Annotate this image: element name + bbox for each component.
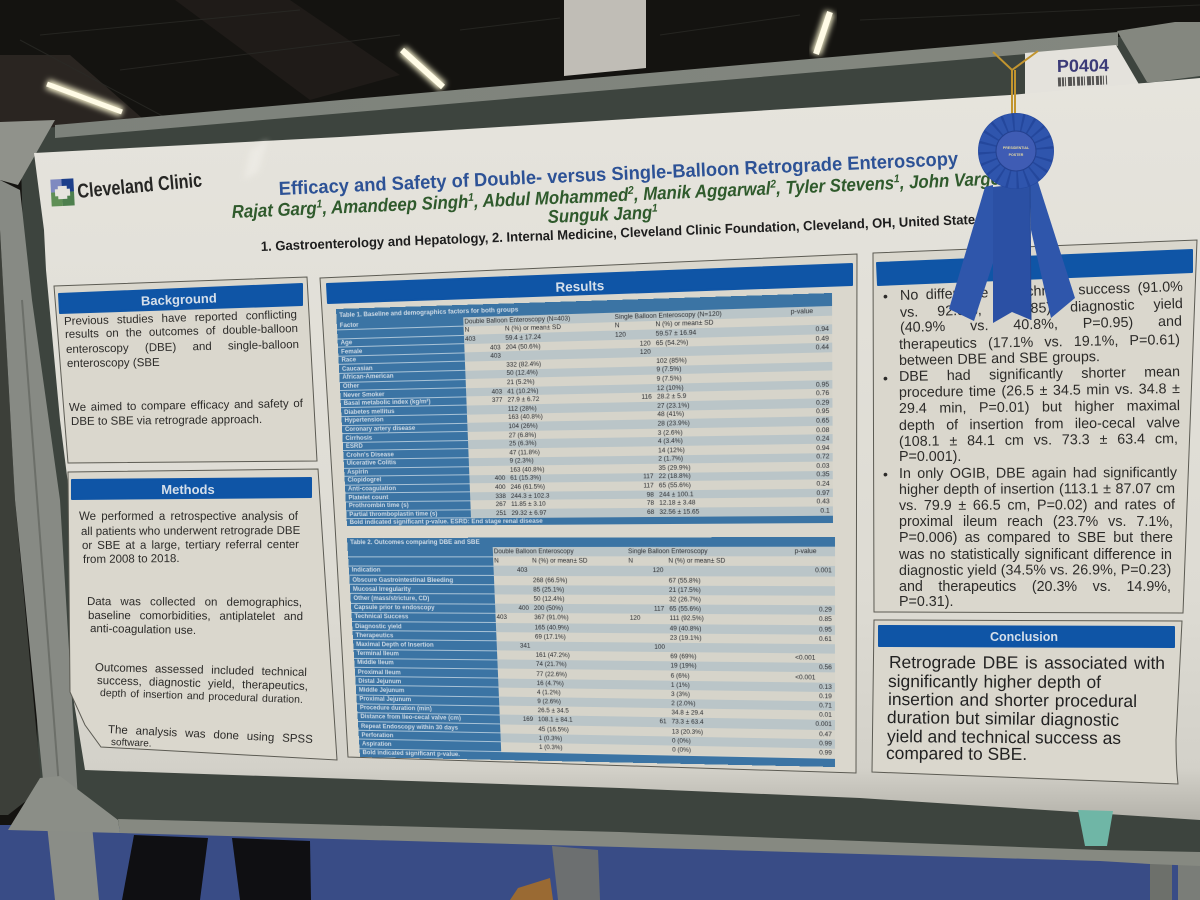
table 1: baseline and demographics: 244.3 ± 102.3 [511,492,550,500]
text: methods: or SBE at a large, tertiary referral center [82,539,299,552]
table 1: baseline and demographics: 9 (7.5%) [657,375,682,383]
title: Efficacy and Safety of Double- versus Single-Balloon Retrograde Enteroscopy [278,149,959,200]
text: key findings: procedure time (26.5 ± 34.5 min vs. 34.8 ± [899,381,1180,401]
table 2: outcomes comparing DBE and SBE: Bold indicated significant p-value. [362,749,460,758]
table 1: baseline and demographics: Never Smoker [343,391,385,399]
table 2: outcomes comparing DBE and SBE: Procedure duration (min) [360,705,432,713]
table 1: baseline and demographics: 35 (29.9%) [658,464,691,472]
table 2: outcomes comparing DBE and SBE: 49 (40.8%) [670,625,701,632]
icon: presidential poster ribbon: PRESIDENTIAL [1003,146,1030,150]
panel: conclusion: Conclusion [990,630,1058,644]
text: conclusion [886,652,1165,764]
table 1: baseline and demographics: Table 1. Baseline and demographics factors for both groups [339,306,518,319]
text: key findings: P=0.31). [899,594,953,610]
text: methods: anti-coagulation use. [90,623,196,637]
table 1: baseline and demographics: Race [341,356,356,364]
text: key findings: higher depth of insertion (113.1 ± 87.07 cm [899,481,1175,498]
table 2: outcomes comparing DBE and SBE: 0.61 [819,635,832,643]
table 1: baseline and demographics: ESRD [346,443,363,450]
table 2: outcomes comparing DBE and SBE: Indication [352,567,381,574]
table 2: outcomes comparing DBE and SBE: 0 (0%) [672,747,691,754]
table 2: outcomes comparing DBE and SBE: 367 (91.0%) [534,614,569,622]
table 1: baseline and demographics: Anti-coagulation [348,485,396,493]
table 2: outcomes comparing DBE and SBE: 0.85 [819,616,832,624]
authors line two: 1 [652,202,658,215]
table 1: baseline and demographics: 251 [496,510,507,517]
authors line one: , Abdul Mohammed [473,184,630,212]
table 2: outcomes comparing DBE and SBE: p-value [795,548,817,555]
table 1: baseline and demographics: 28 (23.9%) [658,420,690,428]
text: key findings: depth of insertion from ileo-cecal valve [899,415,1180,434]
table 1: baseline and demographics: 0.35 [816,471,830,479]
table 1: baseline and demographics: Ulcerative Colitis [347,460,396,467]
table 1: baseline and demographics: 65 (55.6%) [659,482,691,489]
table 2: outcomes comparing DBE and SBE: Aspiration [362,741,392,748]
table 1: baseline and demographics: 61 (15.3%) [510,475,541,482]
table 2: outcomes comparing DBE and SBE: Technical Success [354,613,409,621]
panel: conclusion [872,620,1182,784]
table 1: baseline and demographics: Partial thromboplastin time (s) [349,510,438,518]
poster number tag: P0404 [1057,55,1109,76]
table 1: baseline and demographics: 338 [495,493,506,500]
table 2: outcomes comparing DBE and SBE: 74 (21.7%) [536,661,567,669]
text: key findings: P=0.001). [899,449,961,465]
table 1: baseline and demographics: 0.1 [820,507,830,515]
table 2: outcomes comparing DBE and SBE: N (%) or mean± SD [532,558,588,565]
text: conclusion: compared to SBE. [886,743,1027,764]
table 1: baseline and demographics: Caucasian [342,365,373,373]
poster number tag [1025,45,1140,96]
text: background [64,309,303,428]
table 2: outcomes comparing DBE and SBE: 0.71 [819,702,832,710]
table 1: baseline and demographics: Basal metabolic index (kg/m²) [344,398,431,407]
table 1: baseline and demographics: N (%) or mean± SD [505,324,561,333]
table 2: outcomes comparing DBE and SBE: Distance from Ileo-cecal valve (cm) [360,714,461,722]
table 1: baseline and demographics: Hypertension [344,417,384,424]
text: methods: The analysis was done using SPSS [108,724,313,746]
table 1: baseline and demographics: 0.94 [816,444,829,452]
table 2: outcomes comparing DBE and SBE: 403 [517,567,528,574]
table 2: outcomes comparing DBE and SBE: N [628,558,633,565]
panel: results [320,254,857,773]
table 2: outcomes comparing DBE and SBE: <0.001 [795,654,815,662]
table 2: outcomes comparing DBE and SBE: 0.99 [819,749,832,757]
table 2: outcomes comparing DBE and SBE: 0.29 [819,606,832,614]
table 2: outcomes comparing DBE and SBE: 120 [630,615,641,622]
table 2: outcomes comparing DBE and SBE: 0.13 [819,683,832,691]
table 1: baseline and demographics: Prothrombin time (s) [349,502,409,510]
table 2: outcomes comparing DBE and SBE: 21 (17.5%) [669,587,701,594]
table 2: outcomes comparing DBE and SBE: 200 (50%) [534,605,563,612]
table 1: baseline and demographics: 0.95 [816,381,829,388]
table 2: outcomes comparing DBE and SBE: 26.5 ± 34.5 [538,707,569,715]
panel: key findings [873,240,1197,613]
table 2: outcomes comparing DBE and SBE: Middle Jejunum [359,687,405,694]
table 1: baseline and demographics: 400 [495,484,506,491]
table 1: baseline and demographics: 0.08 [816,426,829,434]
table 1: baseline and demographics: 32.56 ± 15.65 [659,508,699,516]
text: key findings: (40.9% vs. 40.8%, P=0.95) and [900,314,1182,336]
table 1: baseline and demographics: 117 [643,474,654,481]
table 1: baseline and demographics: 0.65 [816,417,829,425]
text: key findings: (108.1 ± 84.1 cm vs. 73.3 ± 63.4 cm, [899,431,1178,450]
table 1: baseline and demographics: 9 (2.3%) [510,458,534,465]
table 1: baseline and demographics: 25 (6.3%) [509,440,537,448]
text: conclusion: yield and technical success as [887,726,1121,748]
table 1: baseline and demographics: 403 [490,353,501,360]
table 2: outcomes comparing DBE and SBE: 61 [659,719,667,726]
table 1: baseline and demographics: Clopidogrel [347,477,382,484]
table 2: outcomes comparing DBE and SBE: 69 (69%) [670,653,696,661]
table 2: outcomes comparing DBE and SBE: 3 (3%) [671,691,690,698]
authors line one: , Amandeep Singh [321,191,469,218]
table 1: baseline and demographics: 267 [496,501,506,508]
table 1: baseline and demographics: p-value [791,307,813,316]
table 1: baseline and demographics: 78 [647,500,654,507]
text: background: DBE to SBE via retrograde approach. [71,414,262,428]
authors line one: 1 [894,173,900,186]
table 2: outcomes comparing DBE and SBE: <0.001 [795,674,816,681]
table 2: outcomes comparing DBE and SBE: 341 [520,642,531,650]
table 1: baseline and demographics: 0.24 [816,435,829,443]
text: methods [79,511,313,750]
table 2: outcomes comparing DBE and SBE: Middle Ileum [357,659,394,667]
table 2: outcomes comparing DBE and SBE: 111 (92.5%) [669,615,704,623]
text: key findings: • [883,466,888,482]
text: methods: from 2008 to 2018. [83,553,180,566]
table 1: baseline and demographics: 120 [640,340,651,347]
table 1: baseline and demographics: 27 (23.1%) [657,402,689,410]
table 2: outcomes comparing DBE and SBE: Maximal Depth of Insertion [356,641,434,649]
table 2: outcomes comparing DBE and SBE: Other (mass/stricture, CD) [353,595,430,602]
text: key findings: therapeutics (17.1% vs. 19.1%, P=0.61) [899,332,1180,353]
table 1: baseline and demographics: 0.76 [816,390,829,398]
text: key findings: and therapeutics (20.3% vs. 14.9%, [899,579,1171,595]
table 2: outcomes comparing DBE and SBE: 268 (66.5%) [533,577,567,584]
text: conclusion: insertion and shorter procedural [888,689,1137,711]
text: background: Previous studies have reported conflicting [64,309,297,328]
table 2: outcomes comparing DBE and SBE: 169 [523,716,533,723]
table 1: baseline and demographics: Single Balloon Enteroscopy (N=120) [614,310,722,321]
text: key findings: In only OGIB, DBE again had significantly [899,465,1177,482]
logo: Cleveland Clinic: Cleveland Clinic [76,170,203,203]
text: conclusion: duration but similar diagnostic [887,707,1119,730]
table 1: baseline and demographics: 68 [647,509,654,516]
table 1: baseline and demographics: 246 (61.5%) [510,484,545,491]
table 1: baseline and demographics: 65 (54.2%) [656,339,688,347]
text: key findings: vs. 92.5%, P=0.85) diagnostic yield [900,296,1183,321]
table 2: outcomes comparing DBE and SBE: 0.001 [815,721,832,729]
table 2: outcomes comparing DBE and SBE [347,537,835,767]
text: conclusion: significantly higher depth of [888,671,1101,692]
table 1: baseline and demographics: Other [343,382,359,390]
table 2: outcomes comparing DBE and SBE: 9 (2.6%) [537,698,561,706]
table 1: baseline and demographics: 59.57 ± 16.94 [656,329,696,338]
table 1: baseline and demographics: 400 [495,475,505,483]
table 1: baseline and demographics: 0.24 [816,480,830,488]
authors line one: , John Vargo [898,168,1001,193]
table 1: baseline and demographics: African-American [342,373,394,381]
table 1: baseline and demographics: 0.49 [816,335,829,343]
table 1: baseline and demographics: N [615,322,620,330]
text: methods: all patients who underwent retrograde DBE [81,525,300,538]
table 2: outcomes comparing DBE and SBE: 6 (6%) [671,672,690,679]
table 1: baseline and demographics: 104 (26%) [508,422,538,430]
table 2: outcomes comparing DBE and SBE: Repeat Endoscopy within 30 days [361,723,458,731]
table 2: outcomes comparing DBE and SBE: 19 (19%) [670,663,697,670]
table 1: baseline and demographics: 0.72 [816,453,830,461]
table 2: outcomes comparing DBE and SBE: N [494,558,499,565]
table 1: baseline and demographics: 14 (12%) [658,447,685,454]
table 2: outcomes comparing DBE and SBE: 161 (47.2%) [536,652,570,659]
table 1: baseline and demographics: 112 (28%) [508,405,537,413]
table 1: baseline and demographics: 204 (50.6%) [506,343,541,351]
table 1: baseline and demographics: 403 [491,388,502,395]
table 1: baseline and demographics: 403 [490,344,501,351]
text: key findings: • [883,370,888,386]
table 2: outcomes comparing DBE and SBE: Therapeutics [355,632,393,639]
table 2: outcomes comparing DBE and SBE: 77 (22.6%) [536,670,567,678]
text: key findings: diagnostic yield (34.5% vs. 26.9%, P=0.23) [899,562,1171,579]
table 1: baseline and demographics: 4 (3.4%) [658,438,683,445]
table 1: baseline and demographics: 0.03 [816,462,830,470]
table 2: outcomes comparing DBE and SBE: 16 (4.7%) [537,680,564,687]
text: key findings: 29.4 min, P=0.01) but higher maximal [899,398,1180,417]
text: key findings: P=0.006) as compared to SBE but there [899,530,1173,546]
table 2: outcomes comparing DBE and SBE: 23 (19.1%) [670,634,702,642]
table 2: outcomes comparing DBE and SBE: 0.99 [819,740,832,747]
panel: results: Results [555,278,604,295]
text: background: results on the outcomes of double-balloon [65,323,298,341]
table 1: baseline and demographics: 244 ± 100.1 [659,491,694,498]
table 2: outcomes comparing DBE and SBE: 1 (0.3%) [539,735,562,742]
table 2: outcomes comparing DBE and SBE: Proximal Jejunum [359,696,411,703]
text: background: We aimed to compare efficacy and safety of [69,398,303,414]
text: key findings: was no statistically significant difference in [899,547,1172,563]
table 1: baseline and demographics: Double Balloon Enteroscopy (N=403) [464,315,570,325]
table 1: baseline and demographics: 3 (2.6%) [658,429,683,436]
table 2: outcomes comparing DBE and SBE: 34.8 ± 29.4 [671,709,703,717]
icon: teal paper cup [1078,810,1113,846]
text: methods: We performed a retrospective analysis of [79,511,298,523]
table 2: outcomes comparing DBE and SBE: 0.01 [819,712,832,719]
table 1: baseline and demographics: 22 (18.8%) [659,473,691,481]
table 2: outcomes comparing DBE and SBE: Double Balloon Enteroscopy [494,548,574,555]
table 2: outcomes comparing DBE and SBE: Single Balloon Enteroscopy [628,548,708,555]
table 2: outcomes comparing DBE and SBE: Table 2. Outcomes comparing DBE and SBE [350,539,480,546]
table 1: baseline and demographics: Coronary artery disease [345,425,415,433]
table 1: baseline and demographics: 403 [465,336,476,343]
table 2: outcomes comparing DBE and SBE: 69 (17.1%) [535,633,566,641]
table 1: baseline and demographics: 59.4 ± 17.24 [505,334,541,342]
authors line two: Sunguk Jang [547,202,653,227]
table 1: baseline and demographics: 98 [647,491,654,498]
text: key findings: • [883,288,888,304]
table 1: baseline and demographics: Platelet count [348,494,388,501]
authors line one: 1 [316,198,323,211]
text: methods: Outcomes assessed included technical [95,662,307,679]
table 1: baseline and demographics: 48 (41%) [657,411,684,419]
text: methods: success, diagnostic yield, therapeutics, [97,675,308,693]
table 1: baseline and demographics: 163 (40.8%) [510,466,545,474]
table 2: outcomes comparing DBE and SBE: 85 (25.1%) [533,586,564,593]
table 1: baseline and demographics: 12 (10%) [657,384,684,392]
table 2: outcomes comparing DBE and SBE: 65 (55.6%) [669,606,701,613]
table 1: baseline and demographics: 41 (10.2%) [507,387,538,395]
table 2: outcomes comparing DBE and SBE: 0.19 [819,693,832,700]
affiliations: 1. Gastroenterology and Hepatology, 2. Internal Medicine, Cleveland Clinic Foundation, Cleveland, OH, United States [261,212,983,254]
table 2: outcomes comparing DBE and SBE: Diagnostic yield [355,623,402,630]
table 1: baseline and demographics: 50 (12.4%) [506,369,538,377]
panel: background: Background [141,290,217,309]
table 2: outcomes comparing DBE and SBE: 45 (16.5%) [538,726,569,733]
text: key findings: proximal ileum reach (23.7% vs. 7.1%, [899,514,1173,530]
table 1: baseline and demographics: 0.94 [816,325,829,333]
text: key findings: DBE had significantly shorter mean [899,364,1180,385]
table 1: baseline and demographics: 27 (6.8%) [509,431,536,439]
table 1: baseline and demographics: 332 (82.4%) [506,360,541,369]
table 1: baseline and demographics: 102 (85%) [656,357,687,365]
table 2: outcomes comparing DBE and SBE: Obscure Gastrointestinal Bleeding [352,576,453,584]
table 2: outcomes comparing DBE and SBE: 0 (0%) [672,737,691,745]
table 1: baseline and demographics: 0.44 [816,344,829,352]
table 2: outcomes comparing DBE and SBE: 4 (1.2%) [537,689,561,696]
table 1: baseline and demographics: 11.85 ± 3.10 [511,501,546,508]
table 1: baseline and demographics: Bold indicated significant p-value. ESRD: End stage renal disease [350,518,543,526]
table 2: outcomes comparing DBE and SBE: 13 (20.3%) [672,728,703,736]
table 2: outcomes comparing DBE and SBE: 100 [654,644,665,651]
authors line one: 2 [769,178,776,191]
table 2: outcomes comparing DBE and SBE: 165 (40.9%) [535,624,569,631]
table 2: outcomes comparing DBE and SBE: 32 (26.7%) [669,596,701,604]
authors line one: , Manik Aggarwal [632,178,772,205]
text: key findings [883,279,1183,610]
panel: methods: Methods [161,482,215,497]
table 1: baseline and demographics: 0.29 [816,399,829,407]
table 2: outcomes comparing DBE and SBE: 0.001 [815,567,832,575]
table 1: baseline and demographics: 0.95 [816,408,829,416]
table 1: baseline and demographics: Cirrhosis [345,434,372,442]
table 1: baseline and demographics: Aspirin [347,468,368,476]
table 2: outcomes comparing DBE and SBE: 400 [518,605,529,612]
authors line one: , Tyler Stevens [775,172,895,198]
table 2: outcomes comparing DBE and SBE: Distal Jejunum [358,677,401,685]
table 2: outcomes comparing DBE and SBE: Terminal Ileum [357,650,399,658]
text: key findings: No difference in technical success (91.0% [900,279,1183,304]
table 1: baseline and demographics: 377 [492,397,503,404]
table 2: outcomes comparing DBE and SBE: 2 (2.0%) [671,700,695,708]
table 1: baseline and demographics: 27.9 ± 6.72 [507,396,539,404]
table 2: outcomes comparing DBE and SBE: 403 [496,614,507,621]
table 1: baseline and demographics: 116 [641,394,652,401]
text: key findings: between DBE and SBE groups. [899,349,1100,369]
table 2: outcomes comparing DBE and SBE: 117 [654,606,664,613]
table 1: baseline and demographics [336,293,833,526]
table 2: outcomes comparing DBE and SBE: 1 (0.3%) [539,744,563,751]
authors line one: 1 [468,191,474,204]
icon: presidential poster ribbon: POSTER [1009,153,1024,157]
table 1: baseline and demographics: N (%) or mean± SD [655,320,714,329]
table 1: baseline and demographics: 9 (7.5%) [656,366,681,374]
table 1: baseline and demographics: Diabetes mellitus [344,408,395,416]
text: methods: Data was collected on demographics, [87,596,302,609]
table 2: outcomes comparing DBE and SBE: 73.3 ± 63.4 [672,719,704,726]
table 1: baseline and demographics: 21 (5.2%) [507,378,535,386]
table 2: outcomes comparing DBE and SBE: 67 (55.8%) [669,577,701,584]
text: conclusion: Retrograde DBE is associated with [889,652,1165,673]
table 1: baseline and demographics: N [465,327,469,334]
table 1: baseline and demographics: 2 (1.7%) [658,455,683,463]
table 1: baseline and demographics: Factor [340,321,359,329]
table 2: outcomes comparing DBE and SBE: 120 [653,567,663,575]
table 1: baseline and demographics: 47 (11.8%) [509,449,540,456]
table 2: outcomes comparing DBE and SBE: 50 (12.4%) [533,596,565,603]
authors line one: 2 [627,184,634,197]
text: key findings: vs. 79.9 ± 66.5 cm, P=0.02) and rates of [899,497,1175,514]
table 2: outcomes comparing DBE and SBE: 0.47 [819,731,832,738]
table 2: outcomes comparing DBE and SBE: 1 (1%) [671,681,690,689]
logo: Cleveland Clinic [50,170,203,207]
text: methods: software. [111,737,152,750]
table 1: baseline and demographics: 0.97 [816,489,830,497]
table 1: baseline and demographics: 117 [643,482,654,490]
table 2: outcomes comparing DBE and SBE: 0.95 [819,626,832,633]
table 2: outcomes comparing DBE and SBE: Proximal Ileum [358,668,401,676]
text: methods: depth of insertion and procedural duration. [100,687,303,706]
table 2: outcomes comparing DBE and SBE: Perforation [361,732,394,739]
table 1: baseline and demographics: 0.43 [817,498,830,506]
table 1: baseline and demographics: Crohn's Disease [346,451,394,459]
table 2: outcomes comparing DBE and SBE: 108.1 ± 84.1 [538,717,573,724]
table 1: baseline and demographics: Age [340,339,352,347]
authors line one: Rajat Garg [231,198,317,222]
table 1: baseline and demographics: 120 [615,331,626,339]
table 1: baseline and demographics: Female [341,348,362,355]
text: background: enteroscopy (DBE) and single-balloon [66,339,299,356]
table 2: outcomes comparing DBE and SBE: 0.56 [819,664,832,672]
panel: background [54,277,317,463]
table 2: outcomes comparing DBE and SBE: Mucosal Irregularity [353,586,411,593]
text: background: enteroscopy (SBE [67,357,160,370]
table 2: outcomes comparing DBE and SBE: Capsule prior to endoscopy [354,604,435,612]
text: methods: baseline comorbidities, antiplatelet and [88,610,303,623]
panel: methods [68,469,337,760]
table 1: baseline and demographics: 29.32 ± 6.97 [511,510,547,517]
table 2: outcomes comparing DBE and SBE: N (%) or mean± SD [668,558,725,565]
table 1: baseline and demographics: 12.18 ± 3.48 [659,500,696,507]
table 1: baseline and demographics: 163 (40.8%) [508,414,543,421]
table 1: baseline and demographics: 28.2 ± 5.9 [657,393,686,401]
table 1: baseline and demographics: 120 [640,349,651,356]
